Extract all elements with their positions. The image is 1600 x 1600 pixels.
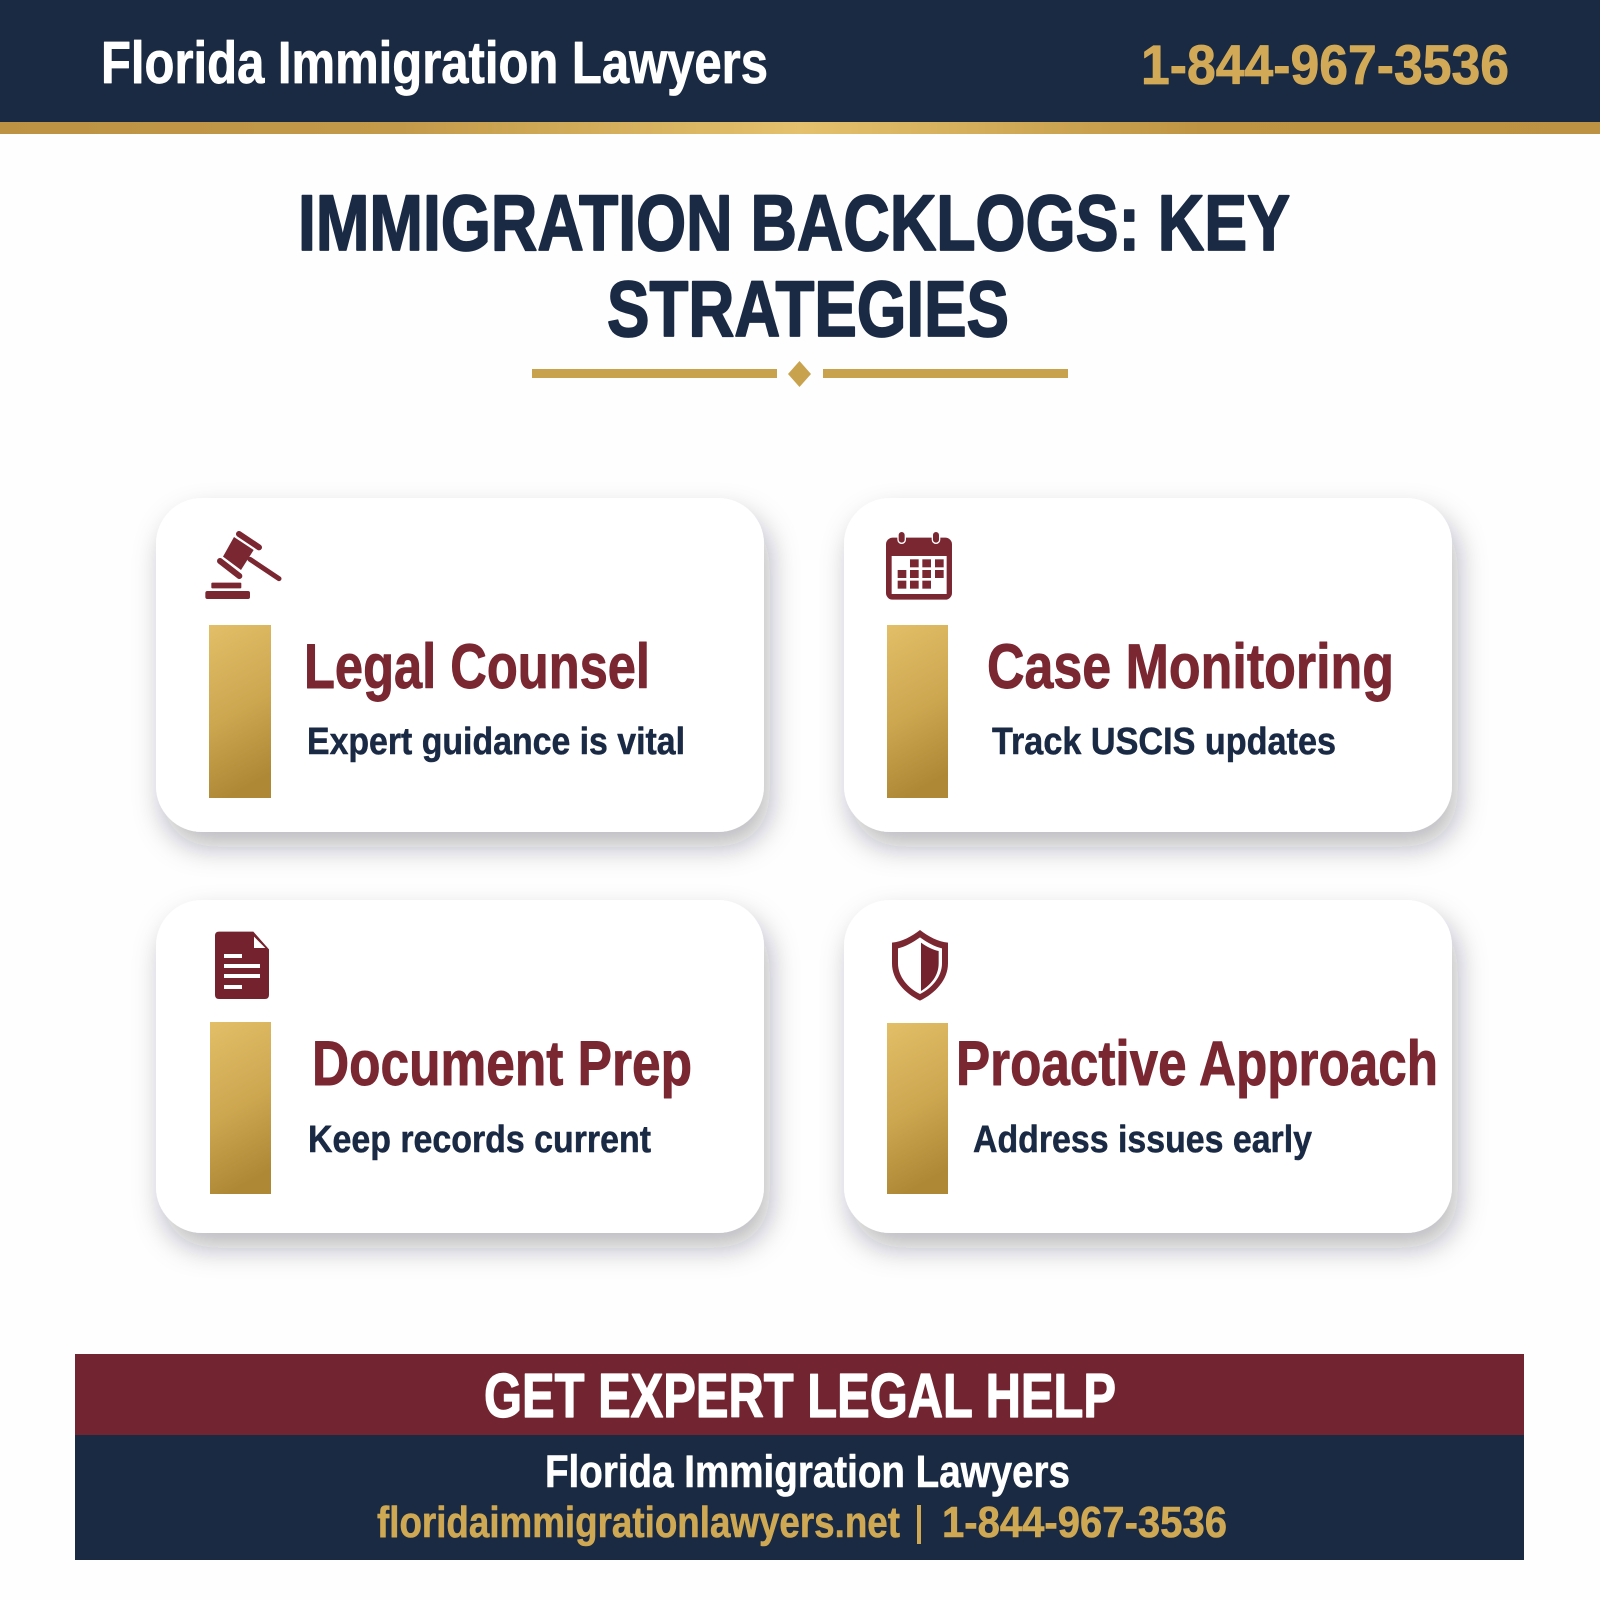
header phone number: 1-844-967-3536 (1141, 33, 1509, 96)
gold accent bar (209, 625, 271, 798)
banner firm name: Florida Immigration Lawyers (545, 1446, 1070, 1497)
banner separator (917, 1505, 921, 1544)
icon: shield (892, 930, 948, 1001)
gold accent bar (210, 1022, 271, 1194)
header bar (0, 0, 1600, 134)
banner contact panel (75, 1435, 1524, 1560)
card heading: Document Prep (312, 1029, 692, 1099)
card heading: Case Monitoring (987, 632, 1394, 702)
header firm name: Florida Immigration Lawyers (101, 30, 768, 96)
title: STRATEGIES (607, 264, 1009, 353)
banner heading: GET EXPERT LEGAL HELP (484, 1362, 1116, 1431)
gold accent bar (887, 1023, 948, 1194)
card description: Track USCIS updates (992, 721, 1336, 763)
card heading: Proactive Approach (956, 1029, 1438, 1099)
header gold rule (0, 122, 1600, 134)
panel: document prep (156, 900, 764, 1233)
card description: Keep records current (308, 1119, 651, 1161)
title (298, 178, 1290, 353)
panel: case monitoring (844, 498, 1452, 832)
call to action banner (75, 1354, 1524, 1560)
icon: calendar (886, 531, 952, 600)
card description: Address issues early (973, 1119, 1312, 1161)
icon: document (215, 932, 269, 999)
panel: legal counsel (156, 498, 764, 832)
card description: Expert guidance is vital (307, 721, 685, 763)
panel: proactive approach (844, 900, 1452, 1233)
icon: gavel (205, 534, 279, 599)
banner phone number: 1-844-967-3536 (942, 1498, 1227, 1547)
card heading: Legal Counsel (304, 632, 650, 702)
title divider with diamond (532, 361, 1068, 387)
gold accent bar (887, 625, 948, 798)
title: IMMIGRATION BACKLOGS: KEY (298, 178, 1290, 267)
banner website: floridaimmigrationlawyers.net (377, 1498, 900, 1547)
